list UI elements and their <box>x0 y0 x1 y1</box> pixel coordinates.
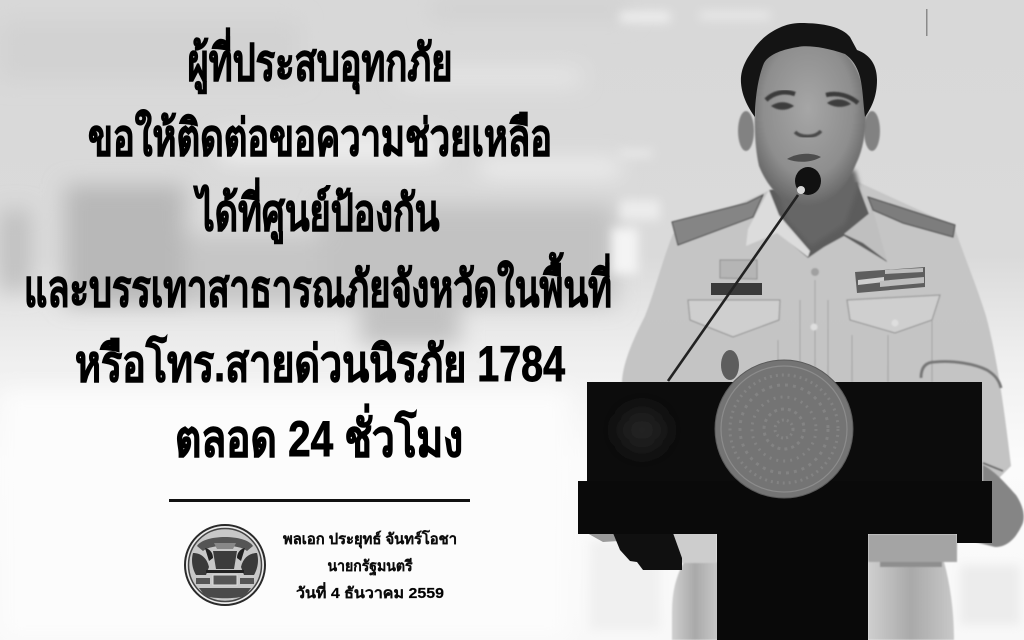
medal ribbons <box>855 267 925 293</box>
speaker photo illustration <box>578 23 1024 640</box>
name tag <box>711 283 762 295</box>
signature text: พลเอก ประยุทธ์ จันทร์โอชา <box>283 529 457 549</box>
headline: ผู้ที่ประสบอุทกภัย <box>188 28 452 94</box>
headline: ขอให้ติดต่อขอความช่วยเหลือ <box>88 109 552 166</box>
headline: ตลอด 24 ชั่วโมง <box>175 404 463 467</box>
right hand <box>975 465 1024 547</box>
head and hair <box>738 23 880 206</box>
headline: หรือโทร.สายด่วนนิรภัย 1784 <box>75 334 565 392</box>
headline: และบรรเทาสาธารณภัยจังหวัดในพื้นที่ <box>24 252 612 317</box>
epaulette left <box>672 195 763 245</box>
signature text: นายกรัฐมนตรี <box>328 558 413 576</box>
pocket emblem <box>721 350 739 380</box>
headline <box>24 28 612 467</box>
uniform torso <box>622 182 1011 496</box>
badge <box>720 260 757 279</box>
left hand <box>587 533 627 542</box>
headline: ได้ที่ศูนย์ป้องกัน <box>193 178 440 244</box>
signature text: วันที่ 4 ธันวาคม 2559 <box>296 582 444 602</box>
microphone <box>668 167 821 381</box>
podium seal <box>715 360 853 498</box>
trousers <box>672 533 957 640</box>
podium <box>578 382 992 640</box>
signature text <box>283 529 457 602</box>
divider rule <box>169 499 470 502</box>
neck <box>771 170 859 246</box>
epaulette right <box>868 197 955 237</box>
emblem seal <box>185 525 265 605</box>
